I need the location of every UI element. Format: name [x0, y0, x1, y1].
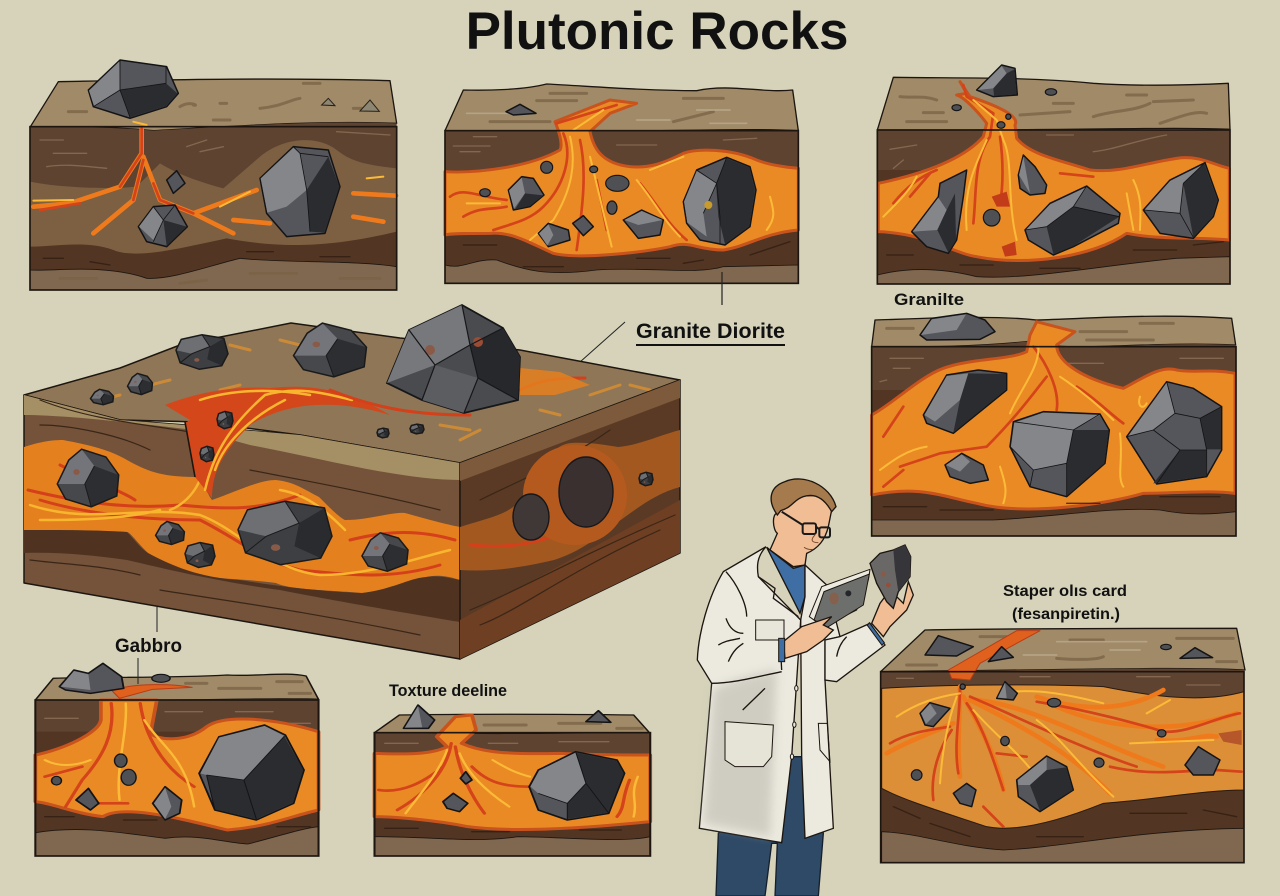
glasses [782, 512, 830, 537]
rock [997, 682, 1017, 700]
magma vein on top face and crack [165, 387, 390, 498]
leader line: top-centre block [721, 272, 723, 305]
rocks on surface [59, 663, 124, 693]
top face [24, 323, 680, 463]
right-face rock halo [523, 445, 627, 545]
pebbles on surface [322, 98, 379, 111]
surface lava streak [948, 631, 1040, 680]
label: Staper olis card [1003, 583, 1127, 623]
rock [912, 170, 967, 253]
pebble [460, 772, 472, 784]
left cuff [779, 638, 785, 662]
pebbles [911, 644, 1171, 780]
rock on surface [1180, 648, 1213, 658]
large rock on surface [387, 305, 520, 413]
buttons [790, 686, 798, 759]
pebble [217, 411, 233, 429]
round rock [983, 209, 1000, 226]
front face [24, 395, 460, 659]
label: Staper olis card: (fesanpiretin.) [1012, 606, 1120, 623]
embedded rock [57, 449, 119, 507]
left hand [783, 617, 833, 658]
crack line [185, 422, 195, 477]
rock on surface [925, 636, 973, 656]
leader line: Gabbro up to big block [156, 607, 158, 632]
right-face pebble [639, 472, 653, 486]
embedded rock [238, 501, 332, 565]
magma veins in front face [28, 465, 600, 575]
panel: top-centre cross-section block [445, 84, 798, 283]
large rock [1010, 412, 1109, 497]
lower pocket right [818, 723, 830, 762]
chest pocket [756, 620, 784, 640]
rock on surface [988, 647, 1013, 662]
nose and mouth [804, 535, 818, 550]
right-face rock [513, 494, 549, 540]
label: Texture deeline: Toxture deeline [389, 681, 507, 700]
dark lower layer [24, 530, 460, 622]
coat fold lines [712, 572, 847, 710]
rock on surface [920, 313, 995, 340]
rock [920, 703, 950, 727]
rock [953, 783, 976, 807]
large rock [1127, 382, 1222, 484]
rock [176, 335, 228, 369]
red cluster [992, 192, 1017, 257]
panel: top-left cross-section block [30, 60, 397, 290]
right hand [872, 582, 913, 637]
embedded rock [362, 533, 408, 571]
leader line: Gabbro down to block [137, 658, 139, 684]
label: Gabbro: Gabbro [115, 636, 182, 657]
small rock [945, 453, 988, 483]
panel: bottom-left cross-section block [35, 663, 319, 856]
rock on surface [88, 60, 178, 118]
top face speckles [100, 340, 650, 440]
rock on surface [404, 705, 435, 728]
large rock [1143, 163, 1218, 238]
rock on surface [506, 104, 536, 115]
embedded rock [138, 205, 187, 247]
embedded rock [185, 543, 215, 567]
hair [771, 479, 836, 515]
figure: scientist examining a rock [697, 479, 913, 896]
blue shirt [767, 547, 805, 613]
coat shading [703, 670, 777, 837]
small rock [167, 171, 185, 193]
lower pocket left [725, 722, 773, 767]
rock on surface [977, 65, 1017, 97]
right-face rock [559, 457, 613, 527]
large rock [1017, 756, 1073, 812]
embedded rock [156, 521, 184, 545]
rock [128, 373, 152, 395]
label: Granite Diorite: Granite Diorite [636, 320, 785, 343]
large embedded rock [260, 147, 340, 237]
lab coat left panel [697, 547, 801, 843]
large rock [1025, 186, 1120, 255]
label: Granite: Granilte [894, 290, 964, 309]
panel: right cross-section block [872, 313, 1236, 536]
panel: bottom-right cross-section block [881, 628, 1245, 863]
rock [443, 793, 468, 812]
pebbles [952, 89, 1057, 128]
rock [923, 370, 1007, 433]
pebbles [52, 674, 170, 785]
magma layer [24, 440, 460, 593]
pebble [200, 446, 214, 462]
rock [76, 788, 99, 810]
pebble [90, 389, 114, 405]
rock [508, 177, 544, 210]
book [809, 569, 870, 627]
lab coat right panel [801, 565, 840, 838]
pebble on surface [586, 711, 611, 722]
large rock [529, 752, 625, 820]
right sleeve [825, 623, 885, 682]
panel: bottom-centre cross-section block [375, 705, 650, 856]
title: Plutonic Rocks [466, 2, 848, 61]
trousers [716, 757, 823, 896]
rock [623, 210, 663, 238]
tan top band [24, 395, 460, 480]
rock [538, 223, 570, 247]
neck and face [770, 495, 832, 567]
right face [460, 380, 680, 659]
label: Staper olis card: Staper olıs card [1003, 583, 1127, 600]
right cuff [867, 623, 884, 645]
pebble [377, 428, 389, 438]
strata lines [30, 400, 675, 635]
large rock [199, 725, 304, 820]
leader line: Granite Diorite to big block [562, 322, 625, 378]
pebbles [480, 161, 629, 214]
panel: top-right cross-section block [877, 65, 1230, 284]
panel: large central cross-section block [24, 305, 680, 659]
pebble [410, 424, 424, 434]
rock [294, 323, 366, 377]
surface lava streak [111, 685, 192, 698]
large rock [683, 157, 756, 245]
rock [1185, 747, 1220, 775]
hand-held rock [870, 545, 911, 608]
rock [573, 216, 593, 236]
rock [153, 787, 182, 820]
rock [1018, 155, 1047, 195]
